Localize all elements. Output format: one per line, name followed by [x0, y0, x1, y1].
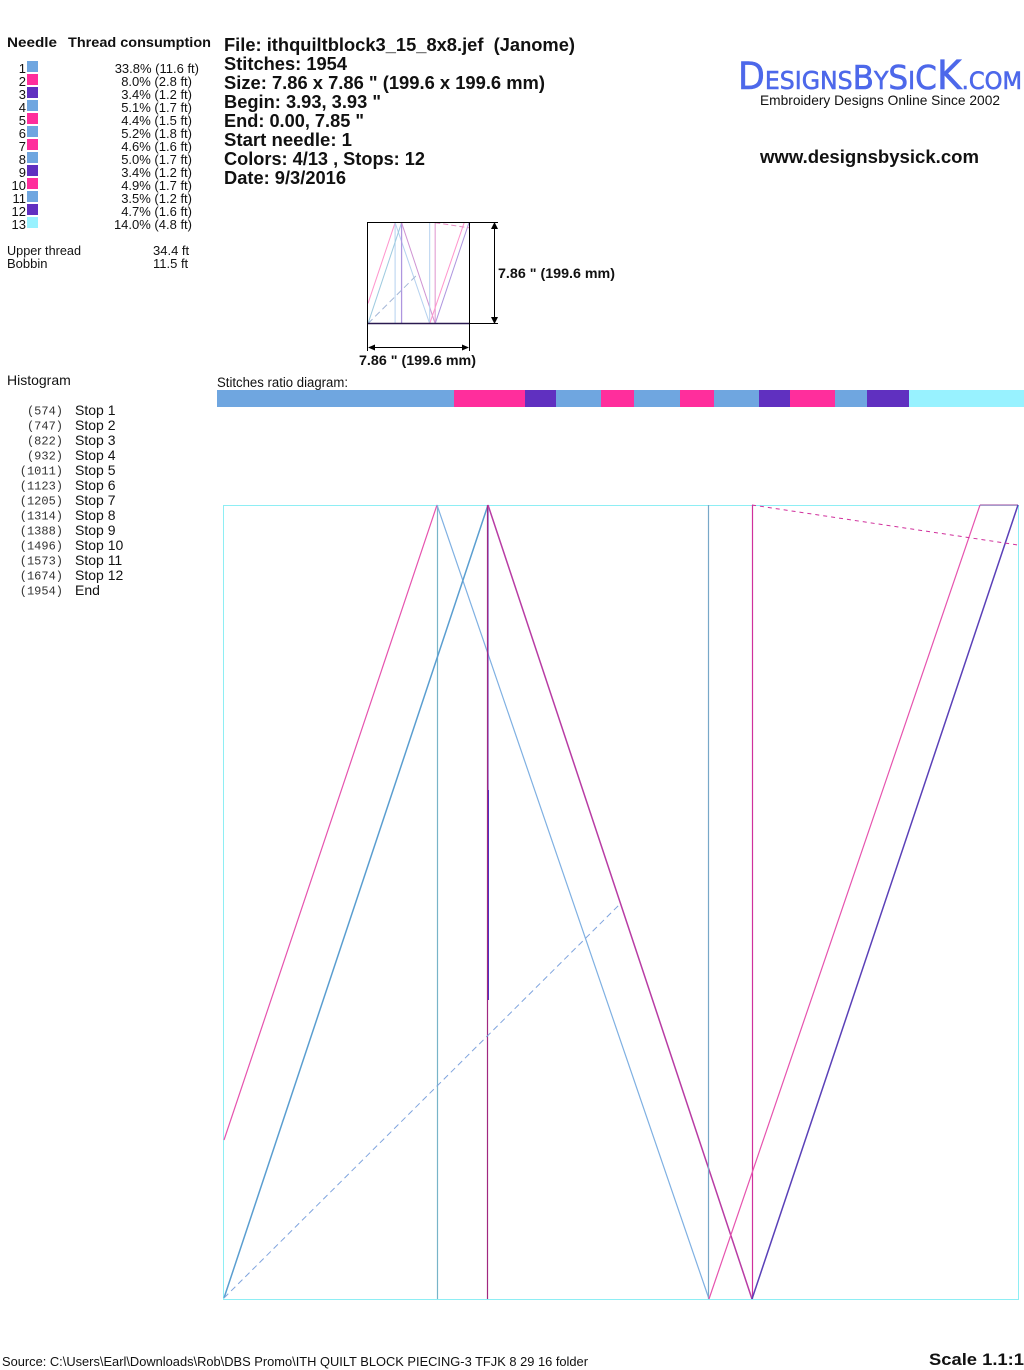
- stop labels: End: [75, 582, 100, 598]
- stitch counts: (1573): [20, 554, 63, 568]
- needle numbers: 10: [12, 178, 26, 193]
- thread totals: 11.5 ft: [153, 256, 189, 271]
- thread totals: Upper thread: [7, 243, 81, 258]
- logo: DesignsBySick.com: [738, 53, 1022, 108]
- stitch counts: (822): [27, 434, 63, 448]
- stitch counts: (1011): [20, 464, 63, 478]
- table heading: Needle: [7, 34, 57, 50]
- needle numbers: 5: [19, 113, 26, 128]
- needle numbers: 13: [12, 217, 26, 232]
- thread percentages: 4.7% (1.6 ft): [121, 204, 192, 219]
- stop labels: Stop 5: [75, 462, 116, 478]
- thread percentages: [114, 61, 199, 232]
- needle numbers: [12, 61, 26, 232]
- file information text block: Start needle: 1: [224, 130, 352, 150]
- stitch counts: (574): [27, 404, 63, 418]
- width label: 7.86 " (199.6 mm): [359, 352, 476, 368]
- stop labels: Stop 4: [75, 447, 116, 463]
- thread percentages: 3.4% (1.2 ft): [121, 165, 192, 180]
- thread percentages: 4.4% (1.5 ft): [121, 113, 192, 128]
- thread percentages: 33.8% (11.6 ft): [115, 61, 199, 76]
- needle numbers: 11: [12, 191, 26, 206]
- panel: stitches ratio diagram: [217, 375, 1024, 407]
- thread percentages: 4.6% (1.6 ft): [121, 139, 192, 154]
- file information text block: File: ithquiltblock3_15_8x8.jef (Janome): [224, 35, 575, 55]
- ratio diagram heading: Stitches ratio diagram:: [217, 375, 348, 390]
- file information text block: Stitches: 1954: [224, 54, 347, 74]
- table heading: [7, 34, 211, 50]
- needle numbers: 7: [19, 139, 26, 154]
- chart: full-size stitch plot: [224, 505, 1018, 1300]
- thread percentages: 3.5% (1.2 ft): [121, 191, 192, 206]
- thread totals: [7, 243, 190, 271]
- stop labels: Stop 6: [75, 477, 116, 493]
- file information text block: Date: 9/3/2016: [224, 168, 346, 188]
- file information text block: [224, 35, 575, 188]
- table heading: Thread consumption: [68, 34, 211, 50]
- scale label: Scale 1.1:1: [929, 1350, 1024, 1369]
- thread percentages: 8.0% (2.8 ft): [121, 74, 192, 89]
- needle numbers: 3: [19, 87, 26, 102]
- stitch counts: (1205): [20, 494, 63, 508]
- needle numbers: 9: [19, 165, 26, 180]
- stop labels: Stop 8: [75, 507, 116, 523]
- file information text block: Colors: 4/13 , Stops: 12: [224, 149, 425, 169]
- stitch counts: [20, 404, 63, 598]
- stitch counts: (1388): [20, 524, 63, 538]
- stop labels: Stop 12: [75, 567, 123, 583]
- website address: www.designsbysick.com: [759, 147, 979, 167]
- stop labels: Stop 11: [75, 552, 122, 568]
- file information text block: Size: 7.86 x 7.86 " (199.6 x 199.6 mm): [224, 73, 545, 93]
- height dimension arrow: [469, 222, 498, 324]
- stitch counts: (1954): [20, 584, 63, 598]
- file information text block: Begin: 3.93, 3.93 ": [224, 92, 381, 112]
- thread percentages: 5.0% (1.7 ft): [121, 152, 192, 167]
- thread percentages: 4.9% (1.7 ft): [121, 178, 192, 193]
- design thumbnail with dimensions: [359, 222, 615, 368]
- histogram heading: Histogram: [7, 372, 71, 388]
- stitch counts: (747): [27, 420, 63, 434]
- panel: needle thread consumption table: [7, 34, 211, 271]
- stop labels: Stop 9: [75, 522, 116, 538]
- needle numbers: 12: [12, 204, 26, 219]
- stitch lines: [224, 505, 1018, 1299]
- stop labels: Stop 10: [75, 537, 123, 553]
- stop labels: [75, 402, 123, 598]
- stop labels: Stop 7: [75, 492, 116, 508]
- ratio bar: [217, 390, 1024, 407]
- stitch counts: (1314): [20, 510, 63, 524]
- needle numbers: 8: [19, 152, 26, 167]
- plot frame: [224, 506, 1018, 1300]
- width dimension arrow: [368, 323, 470, 351]
- stitch counts: (1496): [20, 540, 63, 554]
- needle numbers: 4: [19, 100, 26, 115]
- thread percentages: 3.4% (1.2 ft): [121, 87, 192, 102]
- stitch counts: (1674): [20, 570, 63, 584]
- stop labels: Stop 2: [75, 417, 116, 433]
- needle numbers: 6: [19, 126, 26, 141]
- panel: histogram stop list: [7, 372, 123, 598]
- needle colour swatches: [27, 61, 38, 228]
- thumbnail frame: [368, 222, 470, 324]
- thread totals: 34.4 ft: [153, 243, 190, 258]
- thread percentages: 5.1% (1.7 ft): [121, 100, 192, 115]
- needle numbers: 1: [19, 61, 26, 76]
- stop labels: Stop 1: [75, 402, 116, 418]
- height label: 7.86 " (199.6 mm): [498, 265, 615, 281]
- thread totals: Bobbin: [7, 256, 47, 271]
- file information text block: End: 0.00, 7.85 ": [224, 111, 364, 131]
- thread percentages: 14.0% (4.8 ft): [114, 217, 192, 232]
- thread percentages: 5.2% (1.8 ft): [121, 126, 192, 141]
- stop labels: Stop 3: [75, 432, 116, 448]
- stitch counts: (1123): [20, 480, 63, 494]
- logo wordmark: DESIGNSBYSICK.COM: [738, 53, 1022, 99]
- thumbnail bottom edge: [368, 322, 469, 324]
- source path footer: Source: C:\Users\Earl\Downloads\Rob\DBS Promo\ITH QUILT BLOCK PIECING-3 TFJK 8 29 16 folder: [2, 1355, 588, 1369]
- needle numbers: 2: [19, 74, 26, 89]
- logo tagline: Embroidery Designs Online Since 2002: [760, 92, 1000, 108]
- stitch counts: (932): [27, 450, 63, 464]
- thumbnail stitch preview: [368, 223, 469, 324]
